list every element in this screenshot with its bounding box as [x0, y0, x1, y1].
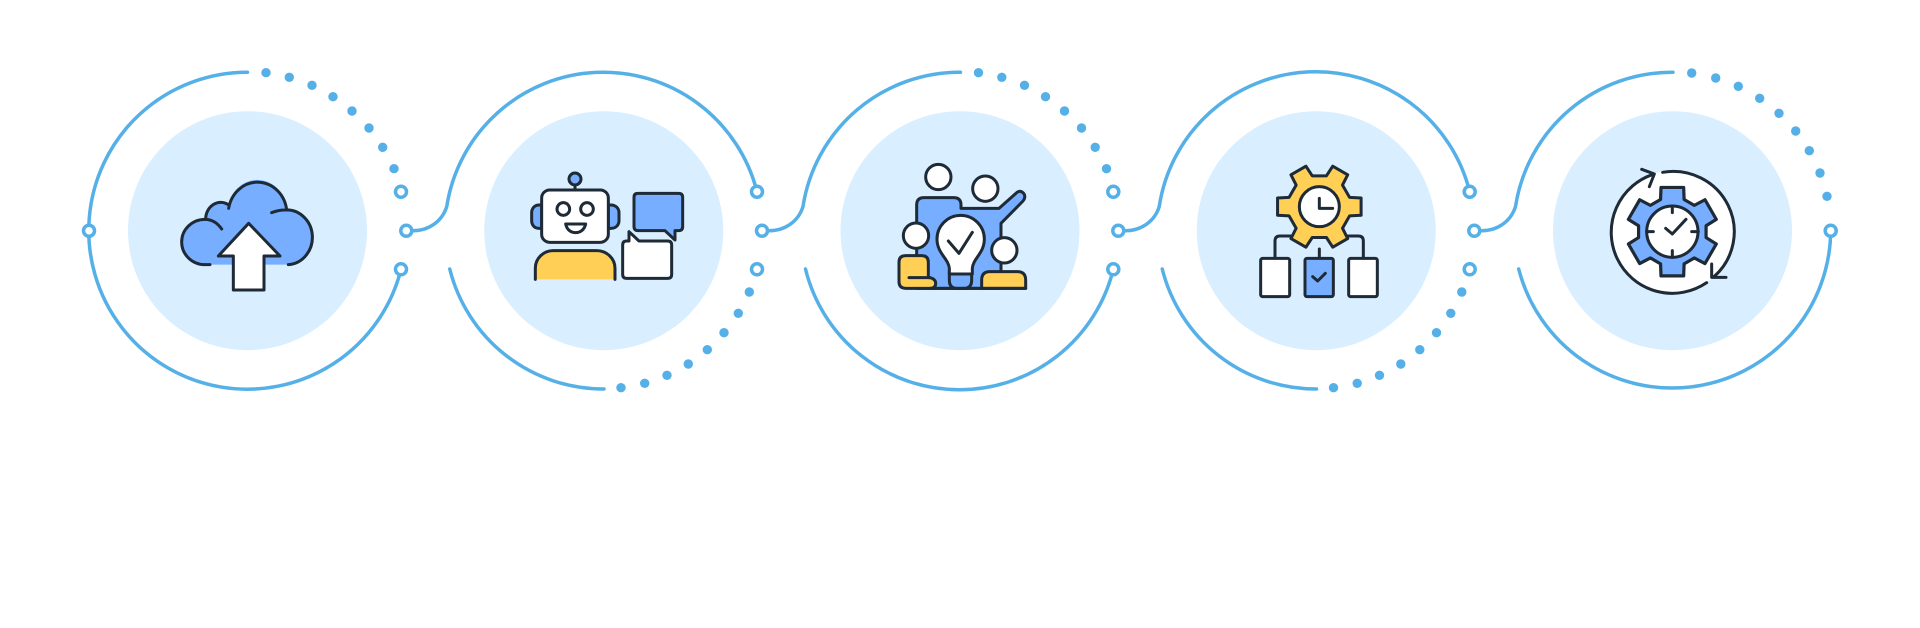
ring 2 bottom [450, 269, 604, 389]
background circle 2 [484, 111, 723, 350]
ring 5 bottom [1519, 231, 1831, 388]
dotted arc 4 [1329, 287, 1467, 392]
step 1: cloud upload [84, 68, 406, 389]
dotted arc 5 [1687, 68, 1832, 201]
icon: gear with clock and cycle arrows [1611, 169, 1734, 293]
dotted arc 1 [261, 68, 399, 173]
ring 2 top with connector [413, 72, 757, 231]
ring 4 bottom [1162, 269, 1316, 389]
dotted arc 3 [974, 68, 1111, 173]
step 5: gear cycle [1469, 68, 1836, 388]
ring 4 top with connector [1126, 72, 1470, 231]
background circle 4 [1197, 111, 1436, 350]
icon: robot and speech bubbles [532, 173, 683, 279]
icon: clock gear with three documents [1261, 166, 1377, 297]
step 3: team with lightbulb [756, 68, 1119, 390]
background circle 5 [1553, 111, 1792, 350]
step 2: chatbot [401, 72, 762, 392]
nodes 4 [1113, 186, 1475, 275]
ring 1 [89, 72, 401, 389]
nodes 2 [401, 186, 762, 275]
nodes 3 [756, 186, 1119, 275]
background circle 1 [128, 111, 367, 350]
background circle 3 [840, 111, 1080, 350]
ring 3 bottom [806, 269, 1113, 390]
nodes 1 [84, 186, 406, 275]
icon: cloud upload [182, 180, 313, 290]
ring 3 top with connector [769, 72, 960, 231]
nodes 5 [1469, 225, 1836, 236]
ring 5 top with connector [1482, 72, 1673, 231]
dotted arc 2 [616, 287, 754, 392]
icon: team and lightbulb [899, 164, 1026, 288]
step 4: gear workflow [1113, 72, 1475, 392]
